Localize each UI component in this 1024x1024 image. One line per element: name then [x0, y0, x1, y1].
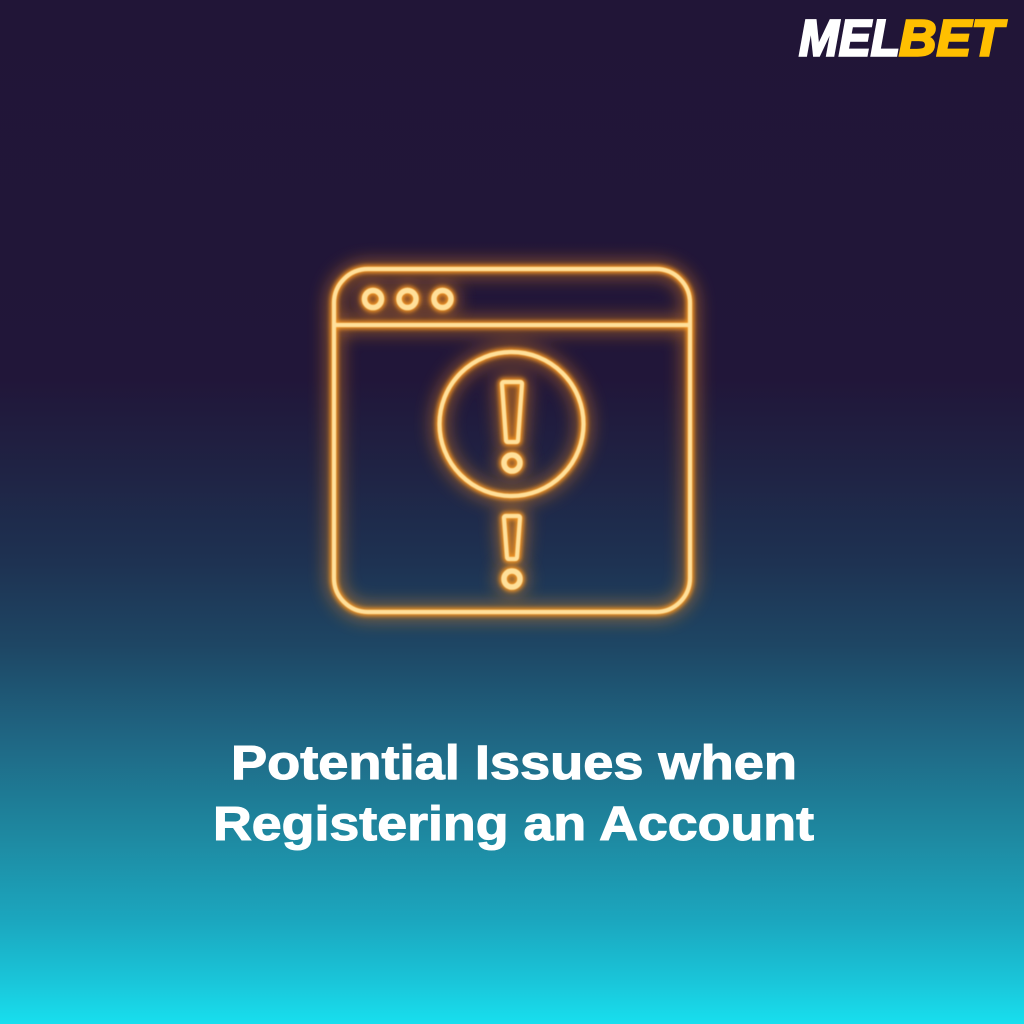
title	[213, 737, 814, 851]
logo word: MEL: MEL	[799, 10, 900, 66]
title line 2: Registering an Account	[213, 798, 814, 851]
logo: MELBET	[799, 10, 1007, 66]
logo word: BET: BET	[899, 10, 1007, 66]
title line 1: Potential Issues when	[231, 737, 797, 790]
icon: neon browser window with warning marks	[334, 269, 690, 612]
